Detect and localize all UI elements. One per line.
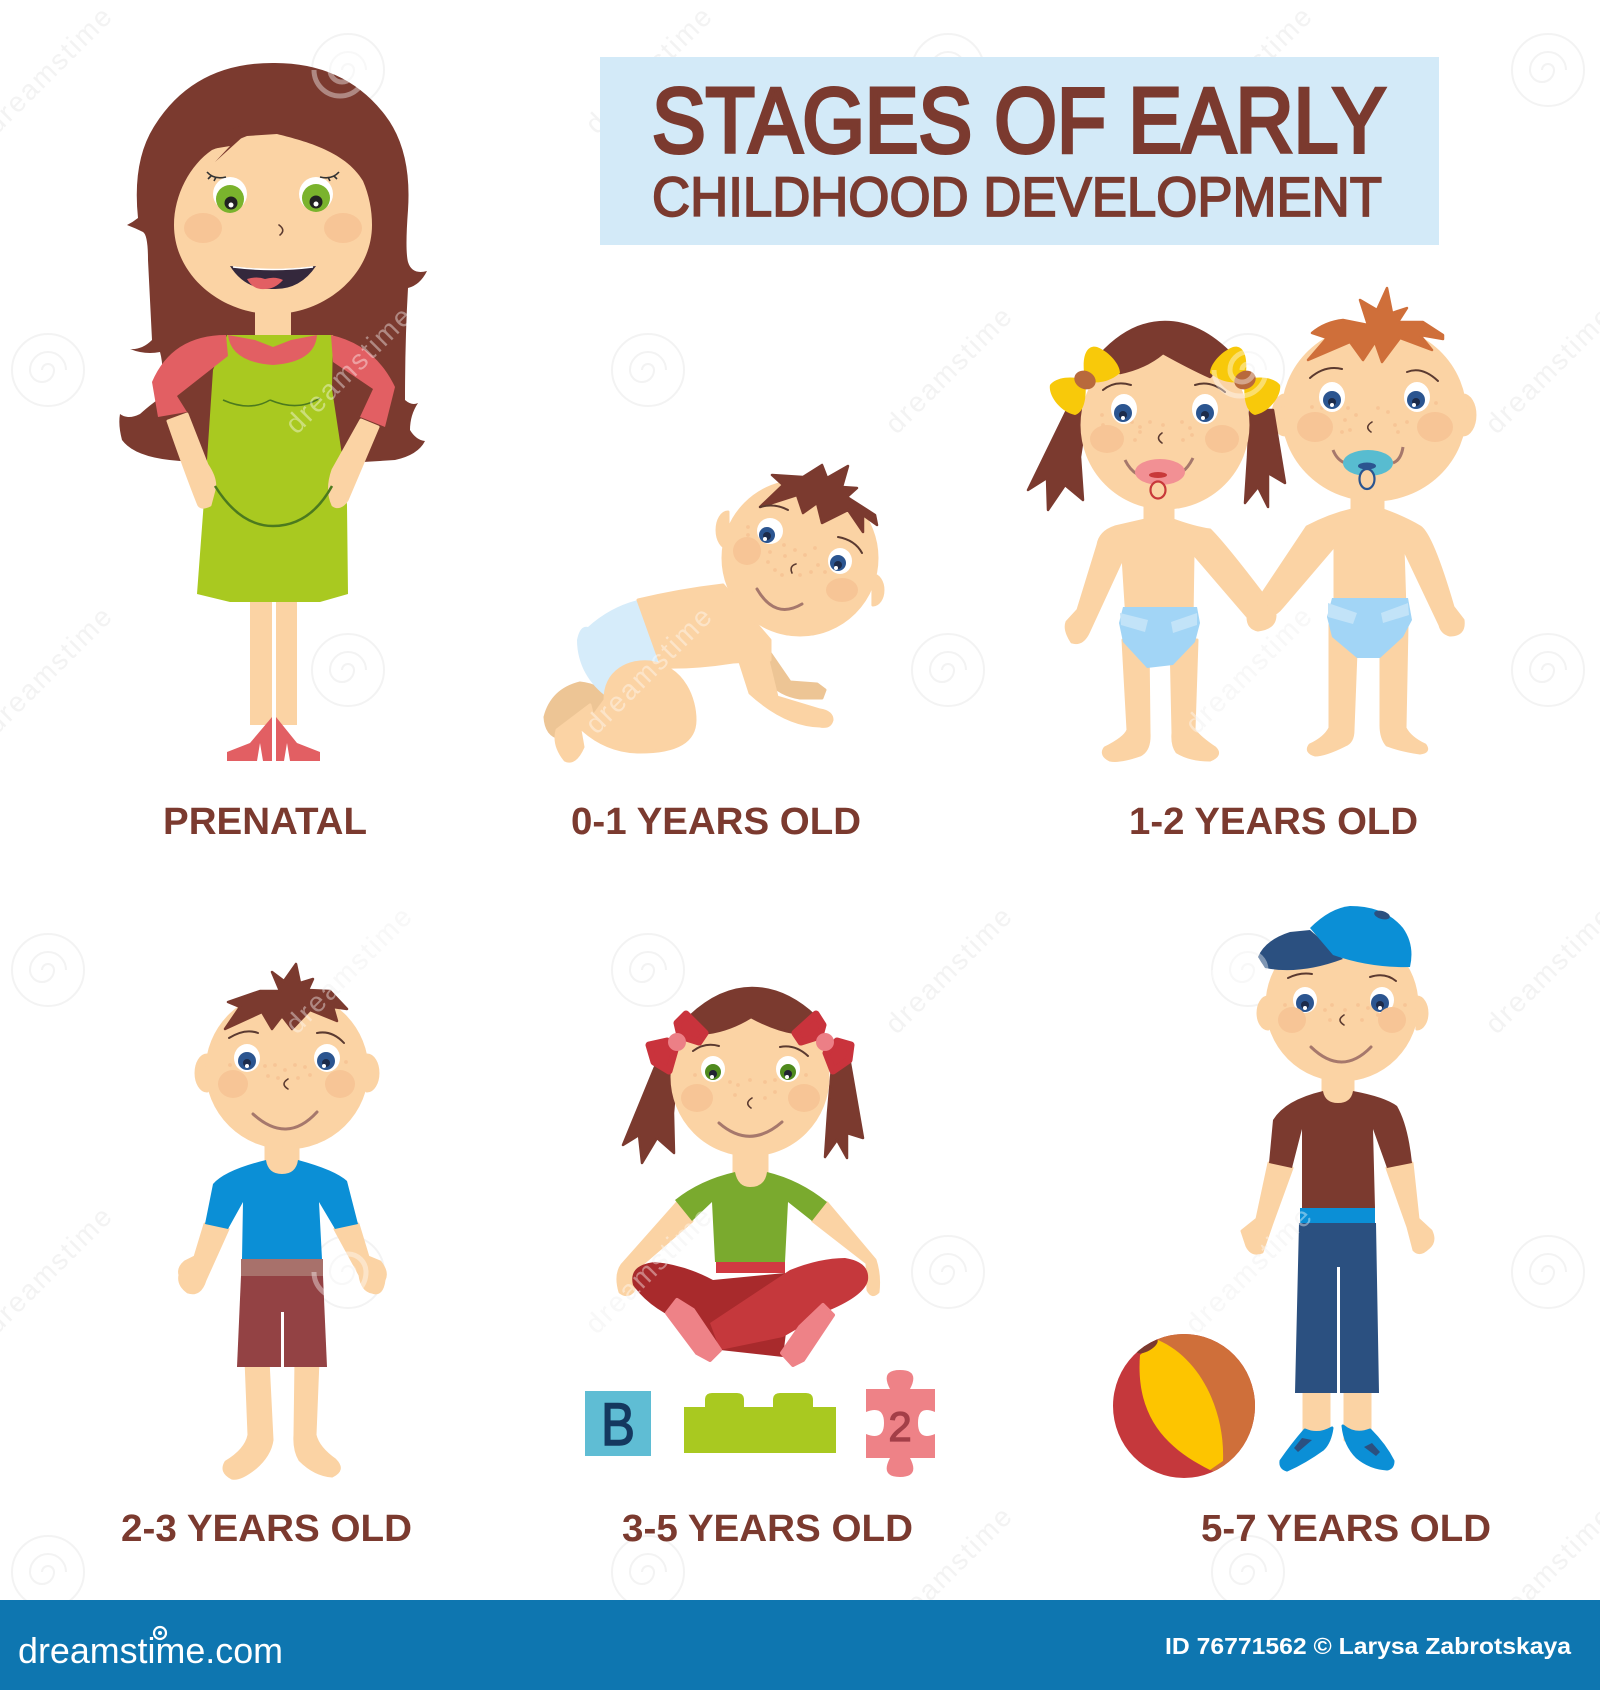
girl: [1028, 322, 1285, 760]
legs and feet: [224, 1360, 339, 1478]
figure: boy in blue shirt (2-3 years): [180, 964, 385, 1478]
figure: pregnant mother (prenatal): [119, 63, 427, 761]
neck: [1323, 1070, 1353, 1110]
body and arms: [1066, 495, 1275, 643]
bows: [649, 1014, 851, 1071]
figure: twins (1-2 years): [1028, 288, 1475, 760]
shorts slit: [281, 1312, 284, 1367]
label: 2-3 years old: 2-3 YEARS OLD: [121, 1508, 412, 1550]
freckles: [748, 527, 825, 575]
figure: crawling baby (0-1 years): [545, 465, 883, 761]
toy: green building brick: [684, 1393, 836, 1453]
background watermark pattern: dreamstime: [879, 901, 1018, 1040]
neck: [266, 1140, 298, 1180]
toy: puzzle piece 2: 2: [888, 1403, 912, 1450]
neck: [734, 1145, 767, 1190]
eyes: [1319, 382, 1430, 412]
cap: [1258, 906, 1411, 970]
hair: [760, 465, 877, 532]
watermark overlay on figures: dreamstime: [579, 1201, 718, 1340]
label: 1-2 years old: 1-2 YEARS OLD: [1129, 801, 1418, 843]
brows, nose: [1288, 974, 1396, 981]
shirt: [675, 1172, 827, 1262]
background watermark pattern: dreamstime: [1179, 601, 1318, 740]
background watermark pattern: dreamstime: [879, 1501, 1018, 1640]
head: [207, 992, 367, 1148]
eyes: [207, 172, 339, 213]
neck: [255, 295, 291, 350]
mouth: [230, 266, 316, 289]
diaper: [1327, 598, 1412, 658]
pigtails: [1028, 410, 1285, 510]
head: [1267, 930, 1417, 1080]
freckles: [230, 1062, 346, 1078]
pigtails: [623, 1063, 863, 1163]
hair: [1100, 322, 1232, 377]
figure: boy with cap and ball (5-7 years): [1112, 906, 1433, 1490]
footer image credit: ID 76771562 © Larysa Zabrotskaya: [1165, 1633, 1571, 1659]
shirt: [205, 1160, 358, 1259]
footer bar: [0, 1600, 1600, 1690]
eyes: [234, 1044, 340, 1072]
diaper: [1119, 607, 1200, 668]
eyes: [701, 1056, 800, 1082]
brows, nose: [229, 1031, 344, 1043]
dress: [197, 335, 348, 602]
boy: [1262, 288, 1475, 755]
dress lines: [215, 486, 332, 526]
background watermark pattern: dreamstime: [1179, 1, 1318, 140]
head: [723, 481, 877, 635]
trousers: [1295, 1223, 1379, 1393]
head: [1082, 342, 1248, 508]
shorts: [237, 1276, 327, 1367]
ears: [717, 512, 883, 605]
belt: [1300, 1208, 1375, 1223]
back foot: [545, 683, 612, 738]
body and arms: [1262, 490, 1463, 635]
title line 1: STAGES OF EARLY: [652, 70, 1386, 172]
legs: [1304, 1390, 1370, 1440]
label: 0-1 years old: 0-1 YEARS OLD: [571, 801, 861, 843]
arms: [618, 1203, 879, 1295]
thigh and knee: [583, 662, 695, 752]
title banner: [600, 57, 1439, 245]
watermark overlay on figures: dreamstime: [279, 301, 418, 440]
watermark overlay on figures: [279, 52, 1318, 1340]
collar and sleeves: [152, 335, 395, 427]
ears: [196, 1055, 378, 1091]
legs: [250, 595, 297, 725]
smile: [253, 1112, 317, 1129]
pacifier: [1125, 458, 1193, 498]
arms and hands: [1242, 1163, 1433, 1253]
watermark overlay on figures: dreamstime: [579, 601, 718, 740]
hair: [225, 964, 347, 1029]
legs and feet: [1308, 625, 1427, 755]
eyes: [1111, 394, 1218, 424]
freckles: [1285, 1005, 1405, 1020]
cheeks: [1090, 425, 1239, 453]
figure: sitting girl (3-5 years): [585, 988, 935, 1477]
socks: [667, 1300, 833, 1365]
hair: [119, 63, 427, 462]
nose: [279, 225, 283, 235]
ears: [1273, 395, 1475, 435]
diaper: [577, 600, 665, 697]
shirt: [1269, 1091, 1412, 1208]
cheeks: [218, 1070, 355, 1098]
eyes: [1293, 987, 1394, 1013]
forearms and hands: [168, 414, 378, 507]
background watermark pattern: dreamstime: [579, 1, 718, 140]
title line 2: CHILDHOOD DEVELOPMENT: [652, 165, 1382, 228]
cheeks: [1278, 1007, 1406, 1033]
shoes: [1281, 1426, 1393, 1470]
label: 3-5 years old: 3-5 YEARS OLD: [622, 1508, 913, 1550]
label: prenatal: PRENATAL: [163, 801, 367, 843]
smile: [1311, 1047, 1371, 1062]
brows, nose: [693, 1045, 808, 1056]
footer logo: dreamstime.com: [18, 1630, 283, 1671]
background watermark pattern: dreamstime: [879, 301, 1018, 440]
torso: [638, 585, 770, 667]
watermark overlay on figures: dreamstime: [1179, 1201, 1318, 1340]
toy: letter block B: B: [601, 1391, 635, 1458]
arms and hands: [180, 1224, 385, 1293]
toy: letter block B: [585, 1391, 651, 1458]
freckles: [1102, 415, 1192, 440]
background watermark pattern: dreamstime: [579, 1201, 718, 1340]
beach ball: [1113, 1334, 1255, 1478]
watermark overlay on figures: dreamstime: [279, 901, 418, 1040]
background watermark pattern: dreamstime: [1179, 1201, 1318, 1340]
cheeks: [681, 1084, 820, 1112]
hair: [1308, 288, 1443, 362]
trousers: [632, 1258, 868, 1357]
bows: [1050, 347, 1280, 415]
hair: [690, 988, 815, 1033]
legs and feet: [1103, 640, 1218, 760]
belt: [241, 1259, 323, 1276]
eyes: [757, 518, 852, 574]
pacifier: [1333, 447, 1403, 489]
cheeks: [184, 213, 362, 243]
back arm: [757, 640, 825, 698]
head: [1283, 326, 1465, 500]
ears: [1258, 997, 1427, 1029]
waistband: [716, 1262, 785, 1273]
shoes: [227, 717, 320, 761]
cheeks: [1297, 412, 1453, 442]
smile: [719, 1122, 782, 1136]
head: [672, 999, 828, 1155]
front arm: [733, 640, 832, 726]
background watermark pattern: dreamstime: [279, 901, 418, 1040]
brows, nose: [1310, 368, 1438, 381]
label: 5-7 years old: 5-7 YEARS OLD: [1201, 1508, 1491, 1550]
brows, nose: [760, 506, 862, 553]
smile: [757, 589, 802, 609]
freckles: [1312, 403, 1436, 432]
front foot: [556, 705, 595, 761]
fringe strand: [212, 126, 247, 162]
face: [174, 134, 372, 314]
cheeks: [733, 537, 858, 602]
brows, nose: [1103, 383, 1225, 392]
toy: puzzle piece 2: [866, 1370, 935, 1477]
freckles: [695, 1075, 806, 1098]
watermark overlay on figures: dreamstime: [1179, 601, 1318, 740]
